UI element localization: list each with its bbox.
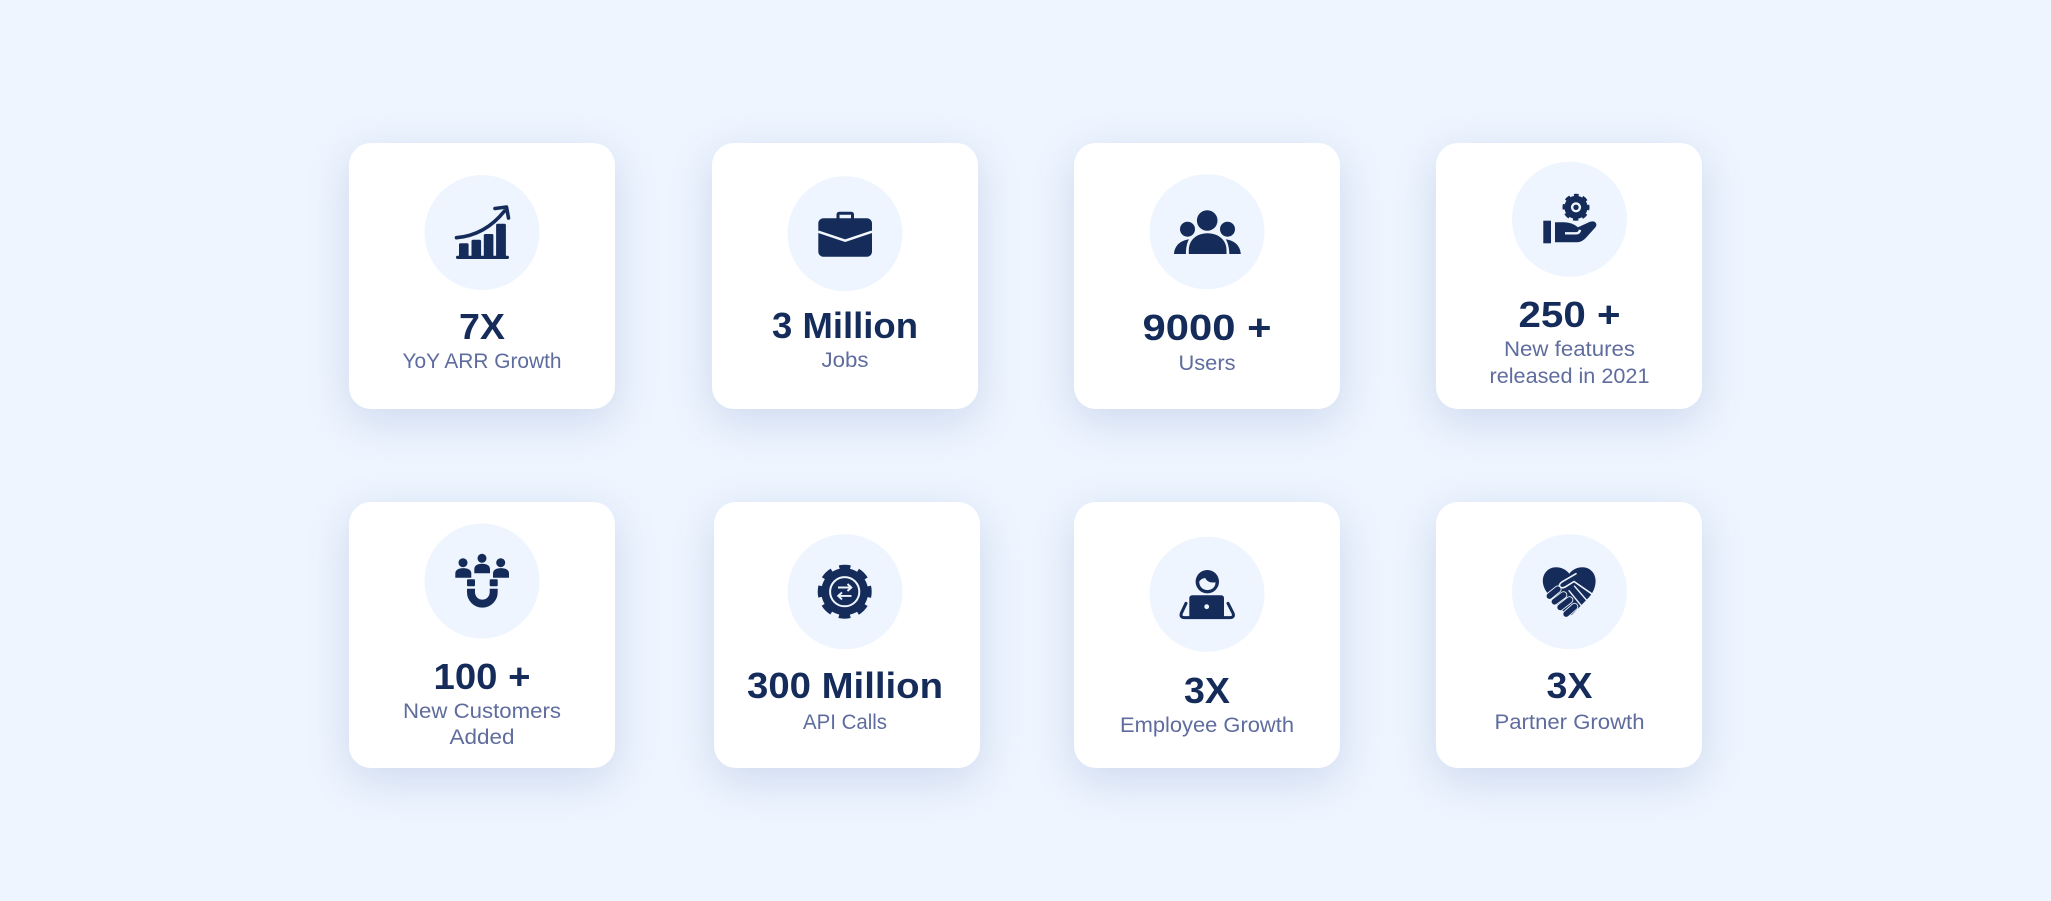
icon: heart handshake xyxy=(1512,534,1627,649)
label: New Customers xyxy=(403,700,561,723)
label: Users xyxy=(1178,352,1236,375)
label: Employee Growth xyxy=(1120,714,1294,737)
panel: API calls xyxy=(714,502,980,768)
icon: hand holding gear xyxy=(1512,162,1627,277)
value: 100 + xyxy=(434,656,530,697)
icon: gear with exchange arrows xyxy=(788,534,902,649)
panel: YoY ARR growth xyxy=(349,143,615,409)
value: 9000 + xyxy=(1142,307,1272,348)
panel: new customers xyxy=(349,502,615,768)
value: 3 Million xyxy=(772,305,918,346)
label line two: released in 2021 xyxy=(1490,365,1650,388)
label: Jobs xyxy=(822,349,868,372)
icon: briefcase xyxy=(788,176,902,291)
label: API Calls xyxy=(803,711,887,734)
icon: magnet attracting people xyxy=(424,524,540,638)
label: Partner Growth xyxy=(1494,711,1644,734)
panel: partner growth xyxy=(1436,502,1702,768)
value: 7X xyxy=(459,306,505,347)
icon: group of people xyxy=(1150,174,1264,289)
panel: new features xyxy=(1436,143,1702,409)
panel: employee growth xyxy=(1074,502,1340,768)
value: 3X xyxy=(1546,665,1592,706)
label: YoY ARR Growth xyxy=(402,350,562,373)
value: 300 Million xyxy=(747,665,943,706)
label line two: Added xyxy=(450,726,514,749)
value: 250 + xyxy=(1518,294,1620,335)
label: New features xyxy=(1504,338,1635,361)
panel: jobs xyxy=(712,143,978,409)
icon: person at laptop xyxy=(1150,537,1264,652)
panel: users xyxy=(1074,143,1340,409)
value: 3X xyxy=(1184,670,1230,711)
icon: rising bar chart xyxy=(424,175,540,290)
